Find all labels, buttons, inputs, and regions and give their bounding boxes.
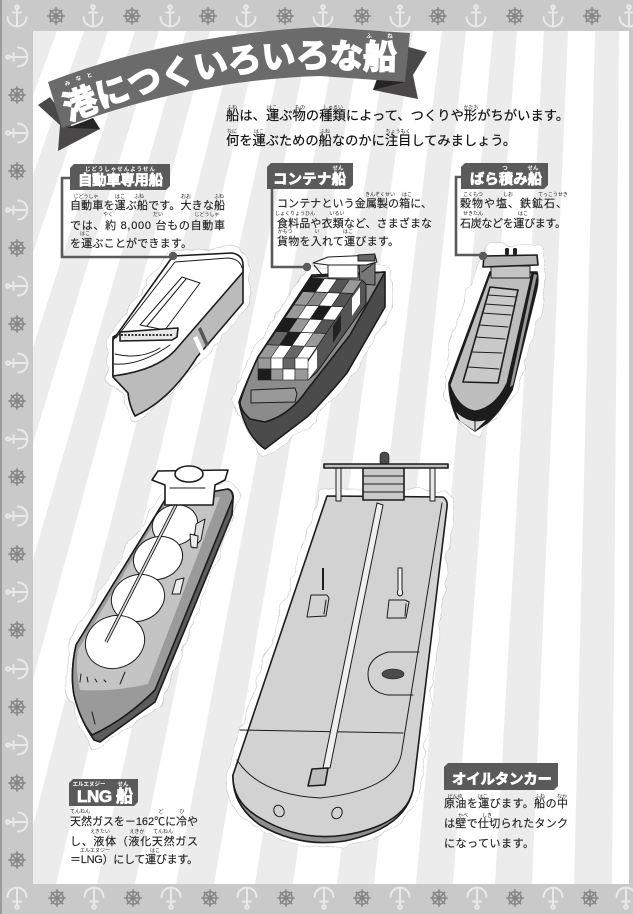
ship halo: oil tanker bbox=[233, 496, 447, 840]
text: LNG carrier: ひ bbox=[179, 809, 185, 815]
text: oil tanker: なか bbox=[557, 793, 567, 800]
text: oil tanker: しき bbox=[482, 812, 492, 819]
intro text: かたち bbox=[463, 104, 479, 111]
title ribbon: ね bbox=[387, 33, 393, 40]
heading: bulk carrier: ばら積み船 bbox=[470, 170, 543, 188]
container side bbox=[308, 280, 366, 380]
text: container ship: いるい bbox=[329, 211, 345, 217]
text: LNG carrier: 天然ガスを－162℃に冷や bbox=[70, 814, 198, 828]
text: LNG carrier: えきたい bbox=[90, 828, 110, 835]
intro text: もの bbox=[295, 105, 305, 111]
text: LNG carrier: えきか bbox=[130, 828, 144, 835]
heading: car carrier: じどうしゃせんようせん bbox=[85, 165, 155, 173]
intro text: しゅるい bbox=[323, 105, 343, 111]
heading: LNG carrier bbox=[69, 779, 138, 806]
text: container ship: コンテナという金属製の箱に、 bbox=[277, 196, 432, 210]
callout: container ship bbox=[267, 163, 432, 271]
LNG tanks bbox=[78, 498, 203, 677]
bridge bbox=[313, 254, 377, 285]
text: oil tanker: 原油を運びます。船の中 bbox=[444, 796, 568, 810]
ship: oil tanker bbox=[233, 452, 448, 843]
text: bulk carrier: はこ bbox=[518, 211, 528, 217]
heading: bulk carrier bbox=[461, 163, 548, 189]
intro text: はこ bbox=[254, 129, 264, 135]
text: oil tanker: は壁で仕切られたタンク bbox=[444, 817, 568, 830]
heading: container ship: せん bbox=[332, 165, 344, 172]
callout: car carrier bbox=[62, 164, 225, 260]
text: car carrier: じどうしゃ bbox=[73, 193, 99, 200]
top border icons bbox=[8, 5, 633, 26]
intro text: なに bbox=[227, 128, 237, 135]
intro text: 船は、運ぶ物の種類によって、つくりや形がちがいます。 bbox=[226, 108, 569, 123]
title ribbon: と bbox=[86, 71, 93, 80]
text: oil tanker: はこ bbox=[478, 794, 488, 800]
ship: LNG carrier bbox=[72, 466, 233, 742]
left border icons bbox=[6, 48, 27, 869]
intro text: 何を運ぶための船なのかに注目してみましょう。 bbox=[226, 133, 516, 148]
callout: bulk carrier bbox=[456, 163, 568, 260]
heading: oil tanker: オイルタンカー bbox=[452, 771, 552, 788]
heading: car carrier bbox=[70, 164, 170, 190]
text: bulk carrier: てっこうせき bbox=[538, 191, 568, 198]
text: container ship: しょくりょうひん bbox=[275, 211, 315, 217]
intro text: ふね bbox=[320, 129, 330, 135]
heading: container ship bbox=[267, 163, 353, 189]
text: car carrier: では、約 8,000 台もの自動車 bbox=[70, 218, 225, 232]
ship halo: LNG carrier bbox=[72, 490, 233, 742]
title ribbon: な bbox=[75, 74, 83, 83]
intro text bbox=[226, 104, 569, 148]
text: bulk carrier: しお bbox=[503, 191, 513, 198]
text: car carrier: 自動車を運ぶ船です。大きな船 bbox=[70, 198, 225, 212]
text: LNG carrier: エルエヌジー bbox=[80, 848, 110, 854]
text: container ship: かもつ bbox=[278, 228, 292, 235]
ship: bulk carrier bbox=[449, 248, 538, 431]
heading: container ship: コンテナ船 bbox=[273, 170, 347, 188]
text: container ship: い bbox=[314, 229, 320, 235]
text: car carrier: はこ bbox=[115, 194, 125, 200]
text: oil tanker: げんゆ bbox=[447, 793, 463, 800]
intro text: ちょうもく bbox=[385, 129, 411, 135]
ship halo: bulk carrier bbox=[450, 250, 538, 431]
heading: bulk carrier: つ bbox=[502, 166, 508, 172]
text: LNG carrier: ど bbox=[158, 808, 164, 815]
ship halo: container ship bbox=[239, 272, 385, 449]
heading: LNG carrier: LNG 船 bbox=[77, 787, 133, 806]
container top grid bbox=[258, 278, 362, 360]
text: bulk carrier bbox=[460, 191, 568, 230]
container front bbox=[258, 358, 308, 380]
ship: container ship bbox=[239, 254, 385, 449]
text: container ship: 貨物を入れて運びます。 bbox=[277, 234, 399, 248]
text: container ship: はこ bbox=[343, 229, 353, 235]
text: bulk carrier: こくもつ bbox=[463, 192, 483, 198]
text: container ship: はこ bbox=[402, 192, 412, 198]
intro text: ふね bbox=[227, 105, 237, 111]
text: oil tanker: になっています。 bbox=[444, 837, 534, 850]
text: LNG carrier: し、液体（液化天然ガス bbox=[70, 834, 198, 848]
bottom border icons bbox=[8, 888, 633, 909]
text: car carrier: ふね bbox=[134, 194, 144, 200]
intro text: はこ bbox=[267, 105, 277, 111]
text: car carrier: だい bbox=[153, 212, 163, 218]
title ribbon: み bbox=[64, 79, 72, 88]
text: car carrier: はこ bbox=[80, 231, 90, 237]
callout: oil tanker bbox=[444, 763, 568, 850]
text: bulk carrier: 穀物や塩、鉄鉱石、 bbox=[460, 196, 567, 210]
ship halo: car carrier bbox=[113, 253, 243, 416]
text: car carrier bbox=[70, 193, 225, 250]
text: LNG carrier bbox=[70, 808, 198, 866]
text: oil tanker: かべ bbox=[458, 812, 468, 819]
title ribbon: ふ bbox=[366, 33, 372, 40]
text: car carrier: ふね bbox=[214, 194, 224, 200]
text: container ship: きんぞくせい bbox=[365, 191, 395, 198]
text: oil tanker: ふね bbox=[535, 794, 545, 800]
text: bulk carrier: 石炭などを運びます。 bbox=[460, 216, 566, 230]
heading: LNG carrier: エルエヌジー bbox=[72, 781, 106, 788]
heading: bulk carrier: せん bbox=[527, 165, 539, 172]
text: car carrier: じどうしゃ bbox=[194, 211, 220, 218]
text: LNG carrier: てんねん bbox=[153, 829, 173, 835]
heading: LNG carrier: せん bbox=[117, 781, 129, 788]
heading: car carrier: 自動車専用船 bbox=[78, 171, 164, 189]
text: LNG carrier: はこ bbox=[150, 848, 160, 854]
ship: car carrier bbox=[113, 253, 243, 416]
title text: 港につくいろいろな船 bbox=[61, 39, 398, 122]
text: bulk carrier: せきたん bbox=[463, 210, 483, 217]
text: car carrier: おお bbox=[181, 193, 191, 200]
text: container ship: 食料品や衣類など、さまざまな bbox=[277, 216, 432, 230]
title ribbon bbox=[38, 27, 427, 151]
text: LNG carrier: てんねん bbox=[70, 809, 90, 815]
text: oil tanker bbox=[444, 793, 568, 850]
text: car carrier: を運ぶことができます。 bbox=[70, 236, 192, 250]
text: container ship bbox=[275, 191, 432, 248]
text: LNG carrier: ＝LNG）にして運びます。 bbox=[70, 853, 198, 866]
text: car carrier: やく bbox=[103, 211, 113, 218]
callout: LNG carrier bbox=[69, 779, 198, 866]
